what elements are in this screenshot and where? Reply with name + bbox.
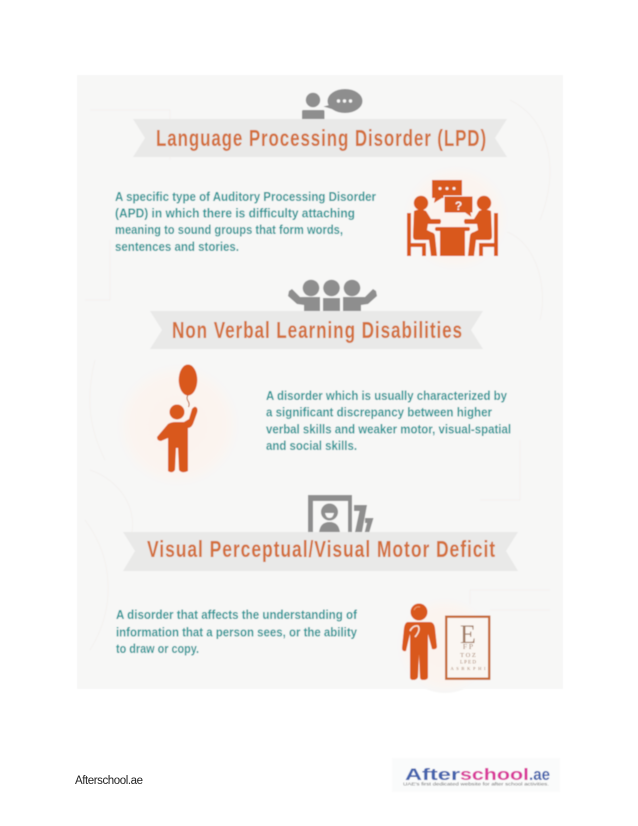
circle: meeting icon glow [403,165,509,271]
heading ribbon: Visual Perceptual/Visual Motor Deficit [123,532,518,571]
footer: site name: Afterschool.ae [75,775,143,787]
icon: eye chart: T O Z [460,652,476,659]
icon: eye chart: A S B K P H I [450,666,486,671]
logo: Afterschool.ae [392,758,560,792]
heading: Language Processing Disorder (LPD): Language Processing Disorder (LPD) [156,125,487,151]
text block: LPD description: sentences and stories. [115,240,239,254]
panel: infographic background [77,75,563,693]
icon: three people with raised arms [288,280,377,311]
text block: LPD description [115,190,376,254]
heading: Non Verbal Learning Disabilities: Non Verbal Learning Disabilities [172,317,463,343]
text block: visual deficit description: information that a person sees, or the ability [116,626,357,640]
icon: two people meeting at a table: ? [455,199,462,213]
text block: visual deficit description [116,608,358,656]
logo: Afterschool.ae: UAE's first dedicated website for after school activities. [403,782,549,786]
text block: LPD description: A specific type of Auditory Processing Disorder [115,190,376,204]
text block: NVLD description: verbal skills and weaker motor, visual-spatial [266,422,511,436]
icon: framed portrait [308,495,374,533]
text block: NVLD description: a significant discrepancy between higher [266,406,492,420]
text block: LPD description: (APD) in which there is difficulty attaching [115,206,355,220]
heading: Visual Perceptual/Visual Motor Deficit: Visual Perceptual/Visual Motor Deficit [147,536,496,562]
logo: Afterschool.ae: school [460,765,529,784]
circle: balloon icon glow [116,363,240,487]
icon: two people meeting at a table [407,180,498,256]
text block: NVLD description: A disorder which is usually characterized by [266,389,507,403]
text block: NVLD description [266,389,511,453]
circle: eye test icon glow [397,597,493,693]
logo: Afterschool.ae: .ae [529,765,550,784]
icon: eye chart: E [460,620,476,649]
icon: eye chart: F P [463,642,473,651]
text block: NVLD description: and social skills. [266,439,357,453]
icon: child holding a balloon [157,364,198,472]
icon: eye chart: L P E D [460,660,476,666]
heading ribbon: Language Processing Disorder [133,119,507,157]
icon: person with question mark head [402,604,437,680]
heading ribbon: Non Verbal Learning Disabilities [150,311,483,349]
logo: Afterschool.ae: After [405,765,461,784]
icon: person with speech bubble [302,89,362,120]
text block: visual deficit description: to draw or copy. [116,642,199,656]
icon: eye chart [446,617,489,679]
text block: visual deficit description: A disorder that affects the understanding of [116,608,358,622]
text block: LPD description: meaning to sound groups that form words, [115,223,343,237]
